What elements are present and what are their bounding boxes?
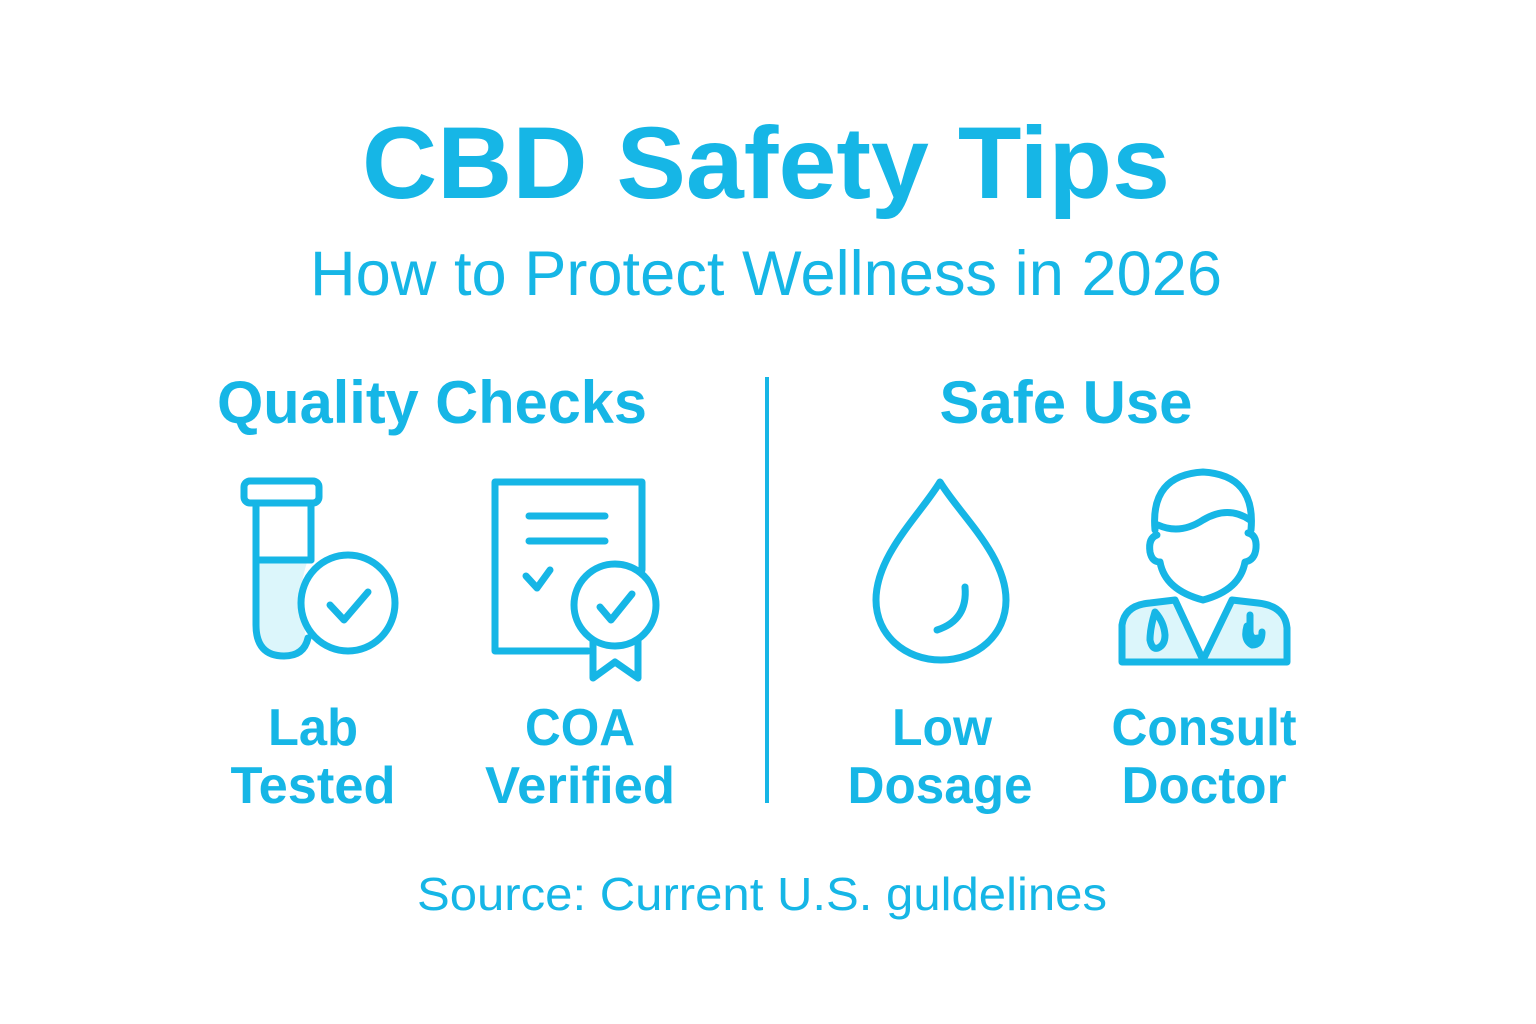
- divider: [765, 377, 769, 803]
- label: Consult Doctor: Consult: [1112, 699, 1296, 757]
- label: Lab Tested: Tested: [230, 757, 396, 815]
- icon: doctor: [1122, 472, 1287, 662]
- icon: test tube with check: [244, 481, 395, 656]
- label: COA Verified: [485, 699, 675, 815]
- label: COA Verified: COA: [525, 699, 635, 757]
- label: Lab Tested: Lab: [268, 699, 358, 757]
- source note: Source: Current U.S. guldelines: [417, 868, 1107, 920]
- icon: COA document with badge: [495, 482, 656, 678]
- label: Lab Tested: [230, 699, 396, 815]
- label: COA Verified: Verified: [485, 757, 675, 815]
- title: CBD Safety Tips: [362, 106, 1170, 220]
- subtitle: How to Protect Wellness in 2026: [310, 239, 1222, 309]
- label: Consult Doctor: [1112, 699, 1296, 815]
- label: Low Dosage: Dosage: [848, 757, 1032, 815]
- label: Low Dosage: [848, 699, 1032, 815]
- label: Low Dosage: Low: [892, 699, 993, 757]
- label: Consult Doctor: Doctor: [1122, 757, 1286, 815]
- heading: Quality Checks: Quality Checks: [217, 369, 647, 436]
- heading: Safe Use: Safe Use: [940, 369, 1192, 436]
- icon: drop: [876, 482, 1006, 660]
